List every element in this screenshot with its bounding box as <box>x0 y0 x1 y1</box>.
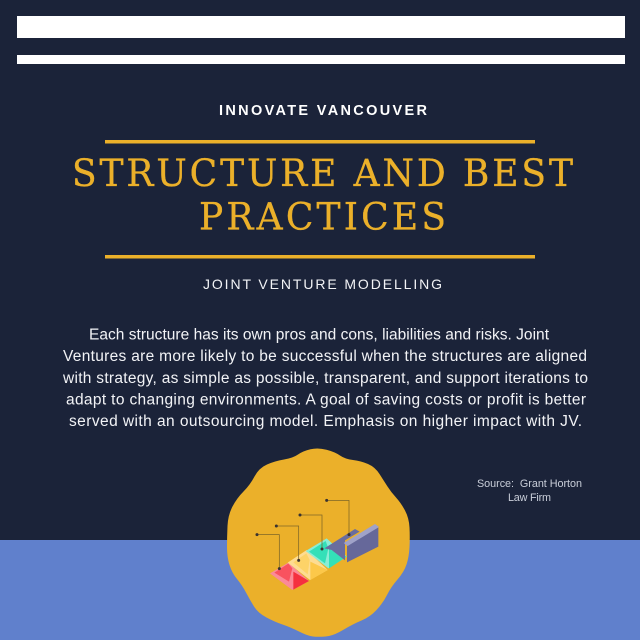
organisation heading: INNOVATE VANCOUVER <box>219 103 428 119</box>
body paragraph: with strategy, as simple as possible, transparent, and support iterations to <box>62 370 588 387</box>
isometric steps illustration <box>255 499 379 590</box>
body paragraph: served with an outsourcing model. Emphasis on higher impact with JV. <box>69 413 582 430</box>
title block: STRUCTURE AND BEST <box>72 151 573 195</box>
body paragraph: Ventures are more likely to be successful when the structures are aligned <box>63 348 587 365</box>
blue footer band <box>0 540 640 640</box>
step: green <box>306 538 347 568</box>
source note: Source: Grant Horton <box>477 478 582 490</box>
body paragraph: Each structure has its own pros and cons, liabilities and risks. Joint <box>89 326 550 344</box>
top white bars <box>17 16 625 64</box>
body paragraph <box>62 326 588 430</box>
step: red <box>270 563 309 590</box>
subtitle: JOINT VENTURE MODELLING <box>203 276 442 292</box>
scalloped gold badge <box>227 448 410 637</box>
step: yellow <box>288 550 328 580</box>
title block: PRACTICES <box>199 195 446 239</box>
step: purple block <box>324 524 379 562</box>
title block <box>72 140 573 258</box>
callout dots <box>255 499 350 570</box>
body paragraph: adapt to changing environments. A goal of saving costs or profit is better <box>66 392 586 408</box>
source note <box>477 478 582 504</box>
source note: Law Firm <box>508 492 551 504</box>
callout leader lines <box>257 500 349 569</box>
